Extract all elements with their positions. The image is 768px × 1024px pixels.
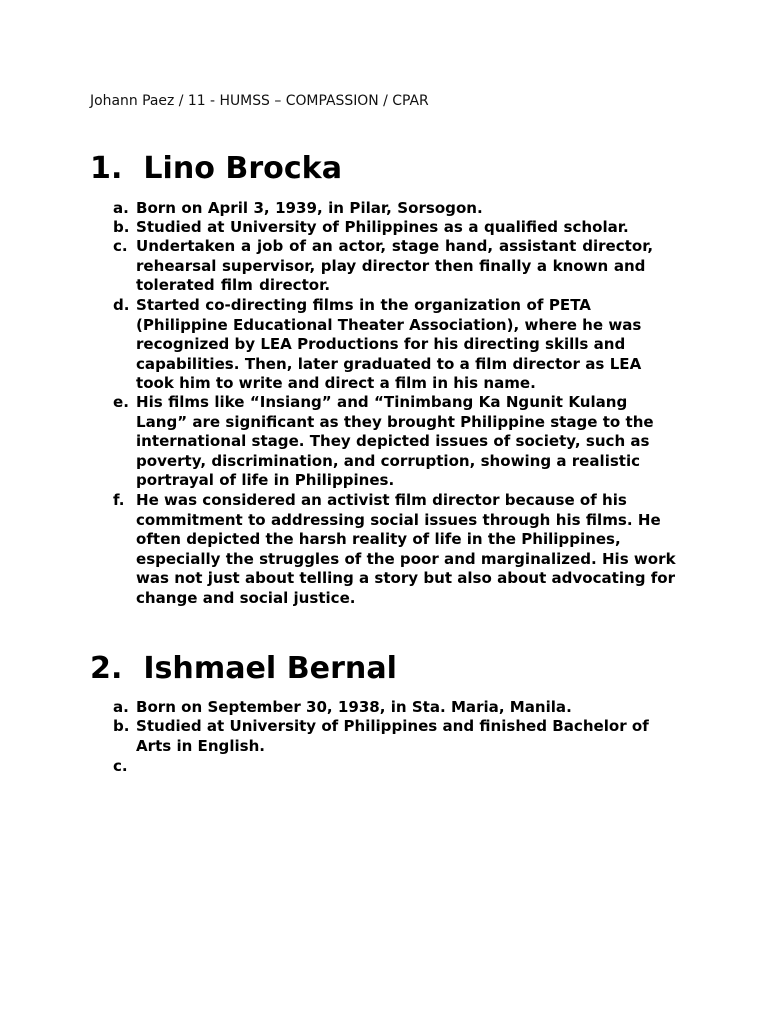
- section: Lino Brocka list: poverty, discrimination, and corruption, showing a realistic: [136, 452, 640, 470]
- section: Ishmael Bernal list: Born on September 30, 1938, in Sta. Maria, Manila.: [136, 698, 572, 716]
- section: Lino Brocka list: rehearsal supervisor, play director then finally a known and: [136, 257, 645, 275]
- section: Ishmael Bernal list: b.: [113, 717, 130, 735]
- section: Lino Brocka list: capabilities. Then, later graduated to a film director as LEA: [136, 355, 641, 373]
- section: Lino Brocka list: f.: [113, 491, 124, 509]
- section: Lino Brocka list: c.: [113, 237, 128, 255]
- section: Lino Brocka list: recognized by LEA Productions for his directing skills and: [136, 335, 625, 353]
- section: Lino Brocka list: Lang” are significant as they brought Philippine stage to the: [136, 413, 654, 431]
- section: Lino Brocka list: a.: [113, 199, 129, 217]
- section: Lino Brocka list: took him to write and direct a film in his name.: [136, 374, 536, 392]
- section: Lino Brocka list: was not just about telling a story but also about advocating for: [136, 569, 675, 587]
- section: Lino Brocka list: d.: [113, 296, 130, 314]
- section: Lino Brocka list: Undertaken a job of an actor, stage hand, assistant director,: [136, 237, 653, 255]
- section: Lino Brocka list: He was considered an activist film director because of his: [136, 491, 627, 509]
- section: Lino Brocka list: (Philippine Educational Theater Association), where he was: [136, 316, 641, 334]
- section: Lino Brocka list: change and social justice.: [136, 589, 356, 607]
- section: Lino Brocka list: often depicted the harsh reality of life in the Philippines,: [136, 530, 621, 548]
- section: Ishmael Bernal list: Studied at University of Philippines and finished Bachelor of: [136, 717, 649, 735]
- section: Lino Brocka list: [113, 199, 676, 607]
- section: Lino Brocka list: Started co-directing films in the organization of PETA: [136, 296, 591, 314]
- section: Ishmael Bernal list: a.: [113, 698, 129, 716]
- section: Lino Brocka list: Born on April 3, 1939, in Pilar, Sorsogon.: [136, 199, 483, 217]
- heading: Ishmael Bernal: 2. Ishmael Bernal: [90, 651, 397, 686]
- section: Lino Brocka list: commitment to addressing social issues through his films. He: [136, 511, 661, 529]
- section: Lino Brocka list: portrayal of life in Philippines.: [136, 471, 394, 489]
- section: Lino Brocka list: international stage. They depicted issues of society, such as: [136, 432, 650, 450]
- section: Lino Brocka list: e.: [113, 393, 129, 411]
- section: Ishmael Bernal list: c.: [113, 757, 128, 775]
- section: Lino Brocka list: tolerated film director.: [136, 276, 330, 294]
- heading: Lino Brocka: 1. Lino Brocka: [90, 151, 342, 186]
- section: Lino Brocka list: His films like “Insiang” and “Tinimbang Ka Ngunit Kulang: [136, 393, 627, 411]
- section: Lino Brocka list: Studied at University of Philippines as a qualified scholar.: [136, 218, 629, 236]
- header line: Johann Paez / 11 - HUMSS – COMPASSION / CPAR: [90, 93, 429, 109]
- section: Lino Brocka list: especially the struggles of the poor and marginalized. His work: [136, 550, 676, 568]
- section: Lino Brocka list: b.: [113, 218, 130, 236]
- section: Ishmael Bernal list: Arts in English.: [136, 737, 265, 755]
- section: Ishmael Bernal list: [113, 698, 649, 775]
